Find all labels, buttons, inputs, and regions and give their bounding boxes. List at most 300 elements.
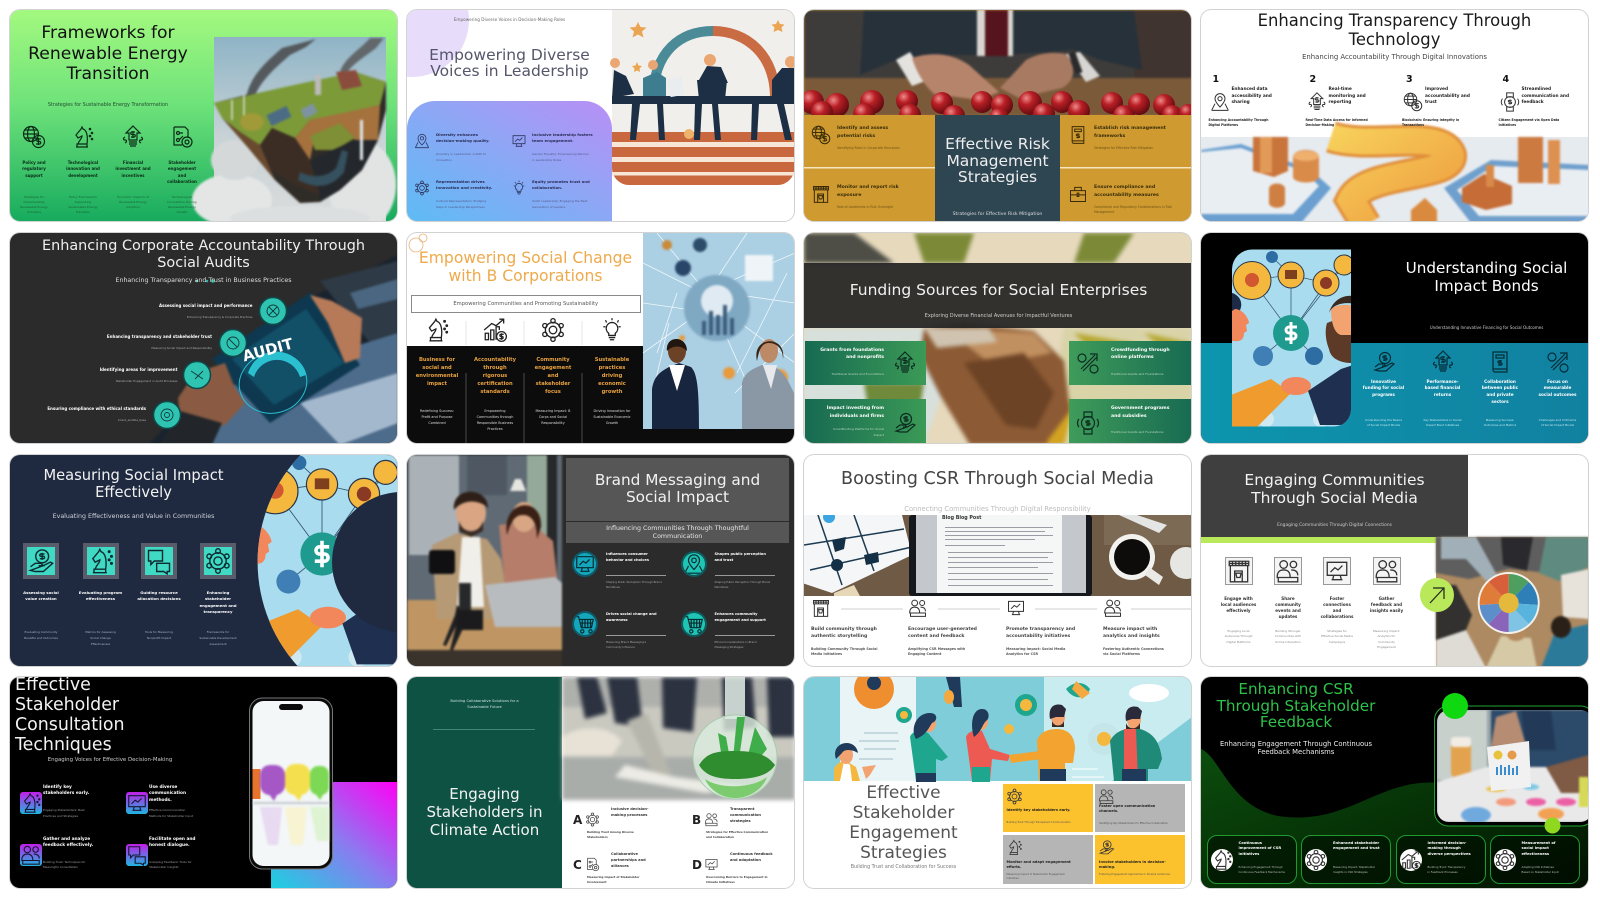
panel: Measuring Social Impact Effectively (10, 455, 397, 666)
label (467, 356, 523, 396)
label (149, 836, 196, 849)
kicker text: Empowering Diverse Voices in Decision-Making Roles (454, 17, 565, 22)
label: feedback effectively. (43, 843, 93, 848)
note: Media Initiatives (811, 652, 842, 656)
label: content and feedback (908, 634, 964, 639)
label: Use diverse (149, 785, 177, 790)
label: Measure impact with (1103, 627, 1157, 632)
icon: speaker (20, 844, 42, 866)
icon: knight (86, 547, 114, 575)
image: finance illustration ring (258, 455, 397, 666)
note: Stakeholder Engagement in Audit Processes (116, 378, 178, 382)
column: share (1264, 558, 1312, 648)
label (1328, 87, 1366, 107)
note: Involvement (587, 880, 607, 884)
label: Identify key (43, 785, 72, 790)
label (525, 356, 581, 396)
label: channels. (1099, 809, 1118, 813)
note: Renewable Energy (20, 204, 48, 208)
image: glass flask with plant on boardroom table (407, 677, 794, 890)
note: Diversity in Leadership: A Path to (436, 152, 486, 156)
label (1111, 346, 1170, 362)
heading: Impact Bonds (1434, 277, 1539, 295)
note: Building Stronger (1275, 629, 1301, 633)
label: Informed decision- (1428, 840, 1466, 844)
heading: Frameworks for (41, 23, 175, 43)
label: Monitor and report risk (837, 185, 899, 190)
label: Enhanced data (1232, 87, 1267, 92)
icon: watch (1076, 411, 1100, 435)
note: Enhancing Accountability Through (1208, 118, 1268, 122)
label: making through (1428, 846, 1461, 850)
item: representation (415, 179, 492, 209)
heading: Voices in Leadership (430, 62, 589, 80)
label: Diversity enhances (436, 132, 478, 137)
label (611, 851, 646, 870)
label: Promote transparency and (1006, 627, 1075, 632)
note: Combined (428, 421, 446, 425)
label (714, 612, 766, 624)
icon: chart (482, 316, 508, 342)
label: Guiding resource (140, 590, 178, 595)
label: Ensure compliance and (1094, 185, 1155, 190)
note: Implementing (24, 200, 44, 204)
icon: arrow coins (1076, 350, 1100, 374)
heading: Boosting CSR Through Social Media (841, 469, 1154, 489)
icon: knight (424, 316, 450, 342)
label: Government programs (1111, 406, 1169, 411)
label: accessibility and (1232, 94, 1272, 99)
note: Measuring Impact: (1373, 629, 1400, 633)
letter: A (573, 813, 582, 827)
note: Measuring Social Impact and Responsibility (151, 346, 212, 350)
note: Campaigns (1329, 640, 1345, 644)
card: informed decisions (1396, 834, 1486, 884)
step 2 (1306, 74, 1398, 134)
label: environmental (416, 372, 458, 378)
note: Sustainable Economic (593, 415, 631, 419)
subtitle: Building Trust and Collaboration for Success (851, 865, 956, 870)
column: analytics (1103, 598, 1198, 658)
note (1428, 864, 1465, 874)
label: Financial (123, 160, 143, 165)
label: Facilitate open and (149, 836, 196, 842)
heading: Technology (1349, 30, 1440, 48)
label: engagement and support (714, 618, 766, 622)
label: innovation and creativity. (436, 185, 492, 190)
heading (945, 135, 1050, 186)
heading: Enhancing CSR (1238, 680, 1354, 698)
label: based financial (1425, 385, 1460, 390)
icon: grid (585, 812, 600, 827)
note (436, 152, 486, 162)
label: analytics and insights (1103, 634, 1160, 639)
icon: hand coin (27, 547, 55, 575)
panel: Empowering Diverse Voices in Leadership (407, 10, 794, 220)
image: couple with camera and laptop (407, 455, 794, 668)
note: Strategies for (24, 194, 44, 198)
label (908, 626, 977, 640)
label: Ensuring compliance with ethical standards (47, 406, 146, 410)
note (117, 194, 149, 208)
label: driving (602, 372, 622, 378)
note (584, 408, 640, 426)
label: Focus on (1547, 378, 1568, 384)
note (1530, 418, 1586, 428)
image text: AUDIT: AUDIT (241, 334, 295, 365)
note: in Feedback Processes (1428, 870, 1458, 874)
label: sectors (1491, 399, 1509, 404)
label: diverse perspectives (1428, 852, 1471, 856)
icon: people (1098, 788, 1115, 804)
icon: money up (1306, 92, 1326, 112)
note: Sustainable Energy (68, 204, 98, 208)
note: Meaningful Consultation (43, 865, 78, 869)
note (532, 152, 589, 162)
label (43, 785, 89, 798)
label: Equity promotes trust and (532, 179, 590, 184)
note: Supporting (75, 200, 91, 204)
heading: Through Stakeholder (1217, 697, 1375, 715)
card: crowdfunding (1069, 340, 1193, 384)
column: resources (130, 543, 188, 643)
item: dialogue (126, 838, 226, 882)
note: Innovation (436, 158, 452, 162)
label (66, 160, 100, 178)
item: diversity (415, 132, 490, 162)
note: Continuous Feedback Mechanisms (1238, 870, 1285, 874)
item: identify (20, 787, 120, 831)
kicker: blog heading in image: Blog Blog Post (942, 516, 981, 520)
note: Understanding the Basics (1365, 418, 1402, 422)
item: establish frameworks (1068, 125, 1188, 159)
label (22, 160, 46, 178)
label: Continuous (1238, 840, 1262, 844)
gradient panel (407, 101, 612, 223)
label: Inclusive leadership fosters (532, 132, 593, 137)
label: measurable (1544, 385, 1571, 390)
note: Outcomes and Metrics (1484, 423, 1516, 427)
label: strategies (730, 819, 751, 823)
label: Enhancing (207, 590, 229, 595)
note: Role of Leadership in Risk Oversight (837, 205, 893, 209)
label: Drives social change and (606, 612, 657, 616)
label (1522, 840, 1555, 858)
label: Collaboration (1484, 378, 1516, 384)
label (1099, 860, 1166, 871)
subtitle box: Empowering Communities and Promoting Sustainability (453, 301, 598, 307)
heading (566, 472, 789, 506)
image: isometric city and road (1201, 10, 1588, 222)
note: and Collaboration (706, 834, 734, 838)
note: Assessment (209, 642, 227, 646)
note: Amplifying CSR Messages with (908, 647, 965, 651)
label: Identify key stakeholders early. (1006, 808, 1071, 812)
label: Enhances community (714, 612, 758, 616)
note: Innovations Driving (167, 200, 197, 204)
note: Traditional Grants and Foundations (1111, 430, 1163, 434)
column: technology (66, 126, 100, 214)
note: Corps and Social (539, 415, 567, 419)
label: Policy and (22, 160, 46, 165)
note: Technological (172, 194, 192, 198)
note: Solutions (27, 210, 41, 214)
card: grants (805, 340, 926, 384)
note (833, 427, 884, 438)
label: Impact investing from (827, 406, 884, 411)
divider (714, 634, 774, 637)
label: accountability initiatives (1006, 634, 1070, 639)
label: social impact (1522, 846, 1549, 850)
icon: people (908, 598, 928, 618)
label: rigorous (483, 372, 507, 378)
label: feedback (1522, 100, 1544, 105)
heading (407, 784, 562, 839)
note: Online Interaction (1275, 640, 1301, 644)
note (1414, 418, 1470, 428)
label: accountability measures (1094, 193, 1159, 198)
note: Measuring Success: (1486, 418, 1514, 422)
note: Enhancing Transparency & Corporate Practices (187, 314, 252, 318)
item: social change (574, 613, 682, 663)
note: Measuring Impact: B (536, 408, 570, 412)
subtitle: Exploring Diverse Financial Avenues for Impactful Ventures (925, 312, 1072, 318)
label (12, 590, 70, 603)
label (1428, 840, 1471, 858)
column: innovative funding (1356, 350, 1412, 430)
note: of Social Impact Bonds (1367, 423, 1400, 427)
label (409, 356, 465, 388)
label: effectiveness (1522, 852, 1549, 856)
subtitle: Enhancing Engagement Through Continuous (1220, 740, 1372, 748)
heading: Social Audits (157, 254, 250, 270)
image: desk with social tiles, tablet and coffee (804, 515, 1191, 610)
number: 3 (1406, 74, 1413, 85)
label: methods. (149, 798, 172, 803)
label: and (178, 173, 186, 178)
label: programs (1372, 392, 1395, 397)
icon: building (811, 184, 831, 204)
label: engagement and (199, 603, 237, 608)
note (1264, 629, 1312, 645)
note (1006, 872, 1065, 880)
label: Community (536, 356, 570, 362)
note: Communities through (477, 415, 513, 419)
icon tile (20, 844, 42, 866)
note: Engaging Content (908, 652, 941, 656)
icon tile (141, 543, 177, 579)
label: collaborations (1321, 614, 1353, 619)
note: Social Change (90, 636, 111, 640)
panel: Enhancing Corporate Accountability Through Social Audits (10, 232, 397, 443)
icon: people (1374, 558, 1400, 584)
label: insights easily (1370, 608, 1403, 613)
note: Renewable Energy (119, 200, 147, 204)
heading: Strategies (958, 168, 1037, 186)
label: Enhancing transparency and stakeholder trust (107, 334, 212, 338)
note: Growth (177, 210, 187, 214)
note: Compliance and Regulatory Considerations in Risk (1094, 205, 1172, 209)
label (1356, 378, 1412, 399)
icon: book (1488, 350, 1512, 374)
note (1522, 864, 1559, 874)
note (532, 199, 588, 209)
note: Citizen Engagement via Open Data (1498, 118, 1559, 122)
label: frameworks (1094, 134, 1125, 139)
note: Narratives (714, 585, 728, 589)
column: business (409, 314, 465, 440)
icon: document coin (812, 126, 830, 144)
icon tile (20, 792, 42, 814)
icon: arrow coins (1546, 350, 1570, 374)
label: initiatives (1238, 852, 1259, 856)
icon: bulb (514, 180, 524, 194)
label: returns (1434, 392, 1451, 397)
label: Accountability (474, 356, 516, 362)
label (1099, 804, 1155, 815)
column: feedback (1362, 558, 1410, 648)
heading: Engaging (449, 784, 520, 802)
note: Engaging Local (1228, 629, 1249, 633)
label (1472, 378, 1528, 405)
note (1472, 418, 1528, 428)
column: storytelling (811, 598, 906, 658)
icon: gear (204, 547, 232, 575)
label: Performance- (1427, 378, 1458, 384)
heading: Engaging Communities (1244, 471, 1425, 489)
label: incentives (121, 173, 145, 178)
note: Identifying Key Stakeholders for Effective Collaboration (1099, 822, 1168, 824)
label: Gather and analyze (43, 836, 90, 842)
subtitle: Enhancing Transparency and Trust in Business Practices (115, 276, 292, 284)
note: in Leadership Roles (532, 158, 561, 162)
note: Profit and Purpose (422, 415, 452, 419)
label: and nonprofits (846, 355, 884, 360)
panel: Boosting CSR Through Social Media (804, 455, 1191, 666)
label: through (483, 364, 507, 370)
icon: knight (20, 792, 42, 814)
note: Driving Innovation for (594, 408, 630, 412)
label: events and (1275, 608, 1301, 613)
label: stakeholder (205, 596, 231, 601)
label: development (68, 173, 98, 178)
label: partnerships and (611, 858, 646, 862)
image: phone with speech bubbles over gradient (10, 677, 398, 890)
label: social and (422, 364, 452, 370)
panel: Frameworks for Renewable Energy Transition (10, 10, 397, 220)
number: 4 (1502, 74, 1509, 85)
icon: knight (1210, 848, 1232, 870)
label: and adaptation (730, 858, 761, 862)
kicker text: Building Collaborative Solutions for a (450, 699, 519, 703)
label: Involve stakeholders in decision- (1099, 860, 1166, 864)
note: Adapting CSR Initiatives (1522, 864, 1554, 868)
card: identify (1002, 784, 1092, 832)
label: stakeholders early. (43, 791, 89, 796)
note (606, 580, 662, 590)
icon: cart (682, 613, 704, 635)
label: Continuous feedback (730, 852, 773, 856)
note: Overcoming Barriers to Engagement in (706, 874, 768, 878)
label: and private (1486, 392, 1514, 397)
item: feedback (20, 838, 120, 882)
note: Tools for Measuring (145, 630, 173, 634)
note: Transition (76, 210, 90, 214)
note: Identifying Risks in Corporate Structures (837, 146, 900, 150)
note (189, 629, 247, 647)
item C (573, 854, 683, 898)
label (532, 179, 590, 190)
note: Blockchain: Ensuring Integrity in (1402, 118, 1459, 122)
label (811, 626, 877, 640)
note: Building Trust: Techniques for (43, 860, 86, 864)
note: Youth Leadership: Engaging the Next (532, 199, 588, 203)
label: collaboration. (532, 185, 562, 190)
label: efforts. (1006, 865, 1021, 869)
icon tile (82, 543, 118, 579)
note: Evaluating Community (25, 630, 57, 634)
label: individuals and firms (830, 414, 884, 418)
note: Policy Frameworks (69, 194, 97, 198)
heading: Effectively (95, 484, 172, 500)
note: Community (1378, 640, 1395, 644)
heading: Enhancing Transparency Through (1258, 11, 1531, 30)
note: of Social Impact Bonds (1541, 423, 1574, 427)
label: potential risks (837, 134, 875, 139)
letter: D (692, 858, 702, 872)
note: Stakeholder Insights (149, 865, 179, 869)
label: engagement (535, 364, 571, 370)
subtitle: Understanding Innovative Financing for Social Outcomes (1430, 324, 1543, 330)
panel: Enhancing Transparency Through Technology (1201, 10, 1588, 220)
note (1498, 118, 1559, 128)
label: Evaluating program (79, 590, 122, 595)
icon: knight (1006, 839, 1022, 856)
label: value creation (25, 596, 57, 601)
icon: chart (1400, 848, 1422, 870)
label: practices (599, 364, 625, 370)
label (1214, 596, 1262, 614)
note: Key Stakeholders in Social (1423, 418, 1462, 422)
note (1094, 205, 1172, 214)
label: honest dialogue. (149, 843, 190, 848)
label: support (25, 173, 43, 178)
note (1208, 118, 1268, 128)
label: engagement and trust (1333, 846, 1380, 850)
heading: Stakeholders in (426, 803, 542, 821)
label: Innovative (1371, 378, 1396, 384)
heading (1202, 681, 1390, 731)
subtitle: Strategies for Sustainable Energy Transformation (48, 102, 168, 108)
label: community (1275, 602, 1301, 607)
note (167, 194, 197, 214)
note (12, 629, 70, 641)
card: engagement and trust (1301, 834, 1391, 884)
note (587, 874, 640, 884)
heading: Enhancing Corporate Accountability Through (42, 238, 365, 254)
heading: Feedback (1260, 713, 1332, 731)
subtitle: Engaging Communities Through Digital Connections (1277, 523, 1392, 528)
subtitle: Influencing Communities Through Thoughtful (606, 524, 749, 532)
heading (429, 46, 590, 80)
label: Improved (1425, 87, 1448, 92)
note (714, 580, 770, 590)
label: connections (1323, 602, 1351, 607)
label: trust (1425, 100, 1437, 105)
label (837, 184, 899, 200)
panel: Understanding Social Impact Bonds (1201, 232, 1588, 443)
note: Benefits and Outcomes (24, 636, 58, 640)
